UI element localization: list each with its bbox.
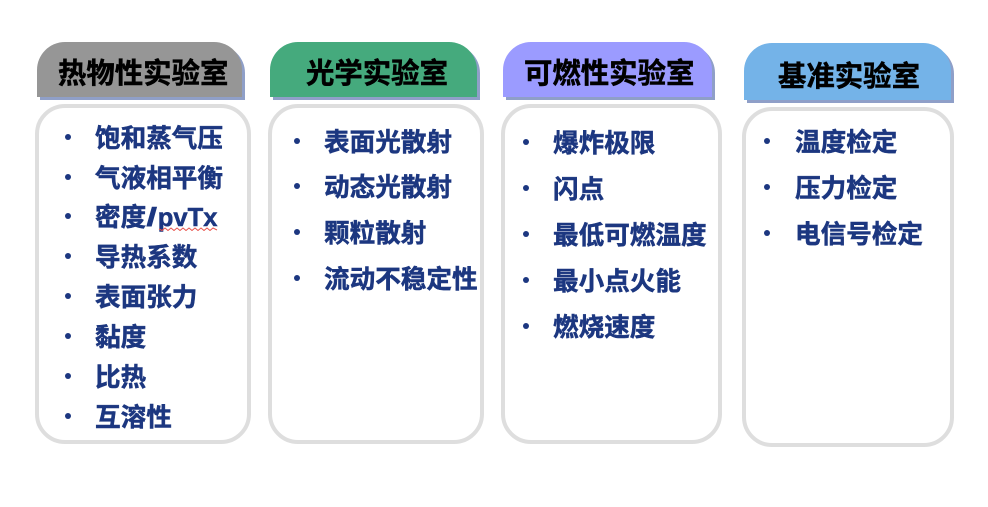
item: 表面光散射 bbox=[324, 129, 452, 157]
item: 动态光散射 bbox=[324, 174, 452, 202]
bullet bbox=[65, 413, 71, 419]
bullet bbox=[523, 139, 529, 145]
item: 温度检定 bbox=[795, 129, 897, 157]
panel: thermophysical items bbox=[35, 104, 251, 444]
bullet bbox=[65, 333, 71, 339]
bullet bbox=[523, 323, 529, 329]
item: 比热 bbox=[95, 364, 146, 392]
bullet bbox=[764, 230, 770, 236]
item: 最小点火能 bbox=[553, 268, 681, 296]
bullet bbox=[764, 184, 770, 190]
bullet bbox=[523, 277, 529, 283]
item: 流动不稳定性 bbox=[324, 266, 478, 294]
item: 爆炸极限 bbox=[553, 130, 655, 158]
bullet bbox=[523, 231, 529, 237]
item: 密度 pvTx bbox=[95, 204, 217, 232]
bullet bbox=[764, 138, 770, 144]
bullet bbox=[65, 253, 71, 259]
heading: thermophysical lab bbox=[37, 42, 242, 97]
bullet bbox=[65, 134, 71, 140]
item: 黏度 bbox=[95, 324, 146, 352]
heading: thermophysical lab: 热物性实验室 bbox=[58, 58, 228, 90]
item: 饱和蒸气压 bbox=[95, 125, 223, 153]
bullet bbox=[65, 174, 71, 180]
bullet bbox=[294, 183, 300, 189]
bullet bbox=[294, 138, 300, 144]
item: 电信号检定 bbox=[795, 221, 923, 249]
item: 导热系数 bbox=[95, 244, 197, 272]
heading: flammability lab: 可燃性实验室 bbox=[524, 58, 694, 90]
panel: flammability items bbox=[501, 104, 722, 444]
bullet bbox=[294, 229, 300, 235]
heading: calibration lab bbox=[744, 43, 951, 100]
heading: calibration lab: 基准实验室 bbox=[778, 61, 920, 93]
bullet bbox=[65, 213, 71, 219]
item: 表面张力 bbox=[95, 284, 197, 312]
item: 压力检定 bbox=[795, 175, 897, 203]
item: 燃烧速度 bbox=[553, 314, 655, 342]
item: 互溶性 bbox=[95, 404, 172, 432]
bullet bbox=[65, 373, 71, 379]
bullet bbox=[65, 293, 71, 299]
item: 颗粒散射 bbox=[324, 220, 426, 248]
item: 闪点 bbox=[553, 176, 604, 204]
heading: optics lab bbox=[270, 42, 477, 97]
item: 气液相平衡 bbox=[95, 165, 223, 193]
heading: flammability lab bbox=[503, 42, 712, 97]
item: / bbox=[147, 204, 157, 232]
bullet bbox=[523, 185, 529, 191]
bullet bbox=[294, 275, 300, 281]
item: 最低可燃温度 bbox=[553, 222, 707, 250]
panel: optics items bbox=[268, 104, 484, 444]
heading: optics lab: 光学实验室 bbox=[306, 58, 448, 90]
panel: calibration items bbox=[742, 107, 954, 447]
